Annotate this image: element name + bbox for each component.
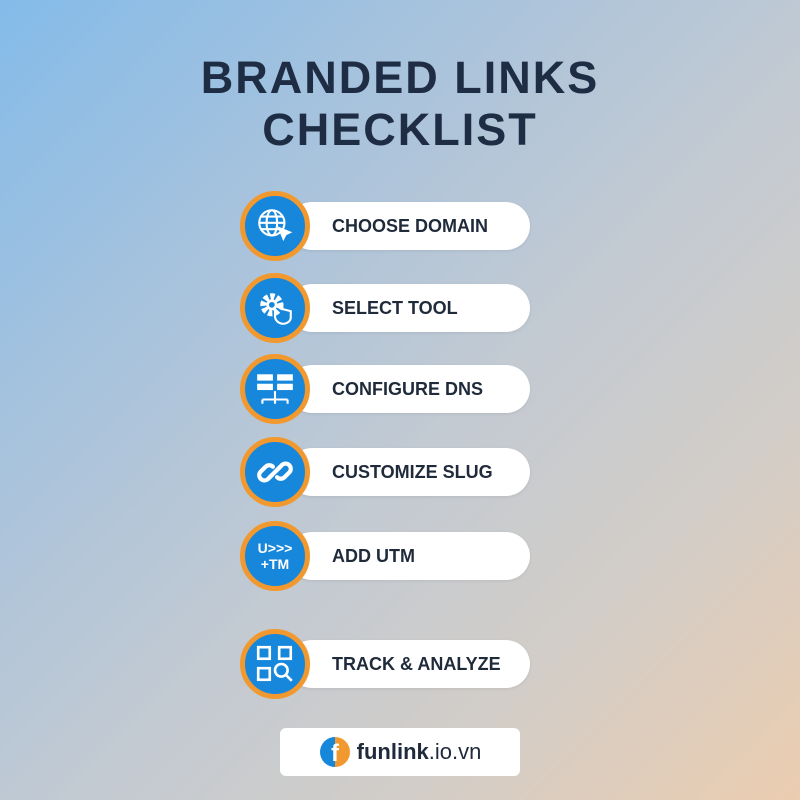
logo: funlink: funlink	[357, 739, 429, 764]
step: track & analyze: TRACK & ANALYZE	[332, 654, 501, 674]
logo: funlink	[280, 728, 520, 776]
step: choose domain	[240, 191, 530, 261]
logo: funlink: .io.vn	[429, 739, 481, 764]
step: choose domain: CHOOSE DOMAIN	[332, 216, 488, 236]
title	[201, 52, 599, 155]
icon: gear	[240, 273, 310, 343]
title: BRANDED LINKS	[201, 52, 599, 103]
step: customize slug: CUSTOMIZE SLUG	[332, 462, 493, 482]
step: configure dns	[240, 354, 530, 424]
icon: link	[240, 437, 310, 507]
icon: servers	[240, 354, 310, 424]
logo: funlink: f	[331, 740, 340, 767]
icon: qr	[240, 629, 310, 699]
icon: utm text: +TM	[261, 556, 289, 572]
step: add utm	[240, 521, 530, 591]
step: customize slug	[240, 437, 530, 507]
title: CHECKLIST	[262, 104, 538, 155]
icon: globe	[240, 191, 310, 261]
icon: utm text	[240, 521, 310, 591]
step: add utm: ADD UTM	[332, 546, 415, 566]
icon: utm text: U>>>	[258, 540, 292, 556]
step: select tool: SELECT TOOL	[332, 298, 458, 318]
step: track & analyze	[240, 629, 530, 699]
step: select tool	[240, 273, 530, 343]
step: configure dns: CONFIGURE DNS	[332, 379, 483, 399]
